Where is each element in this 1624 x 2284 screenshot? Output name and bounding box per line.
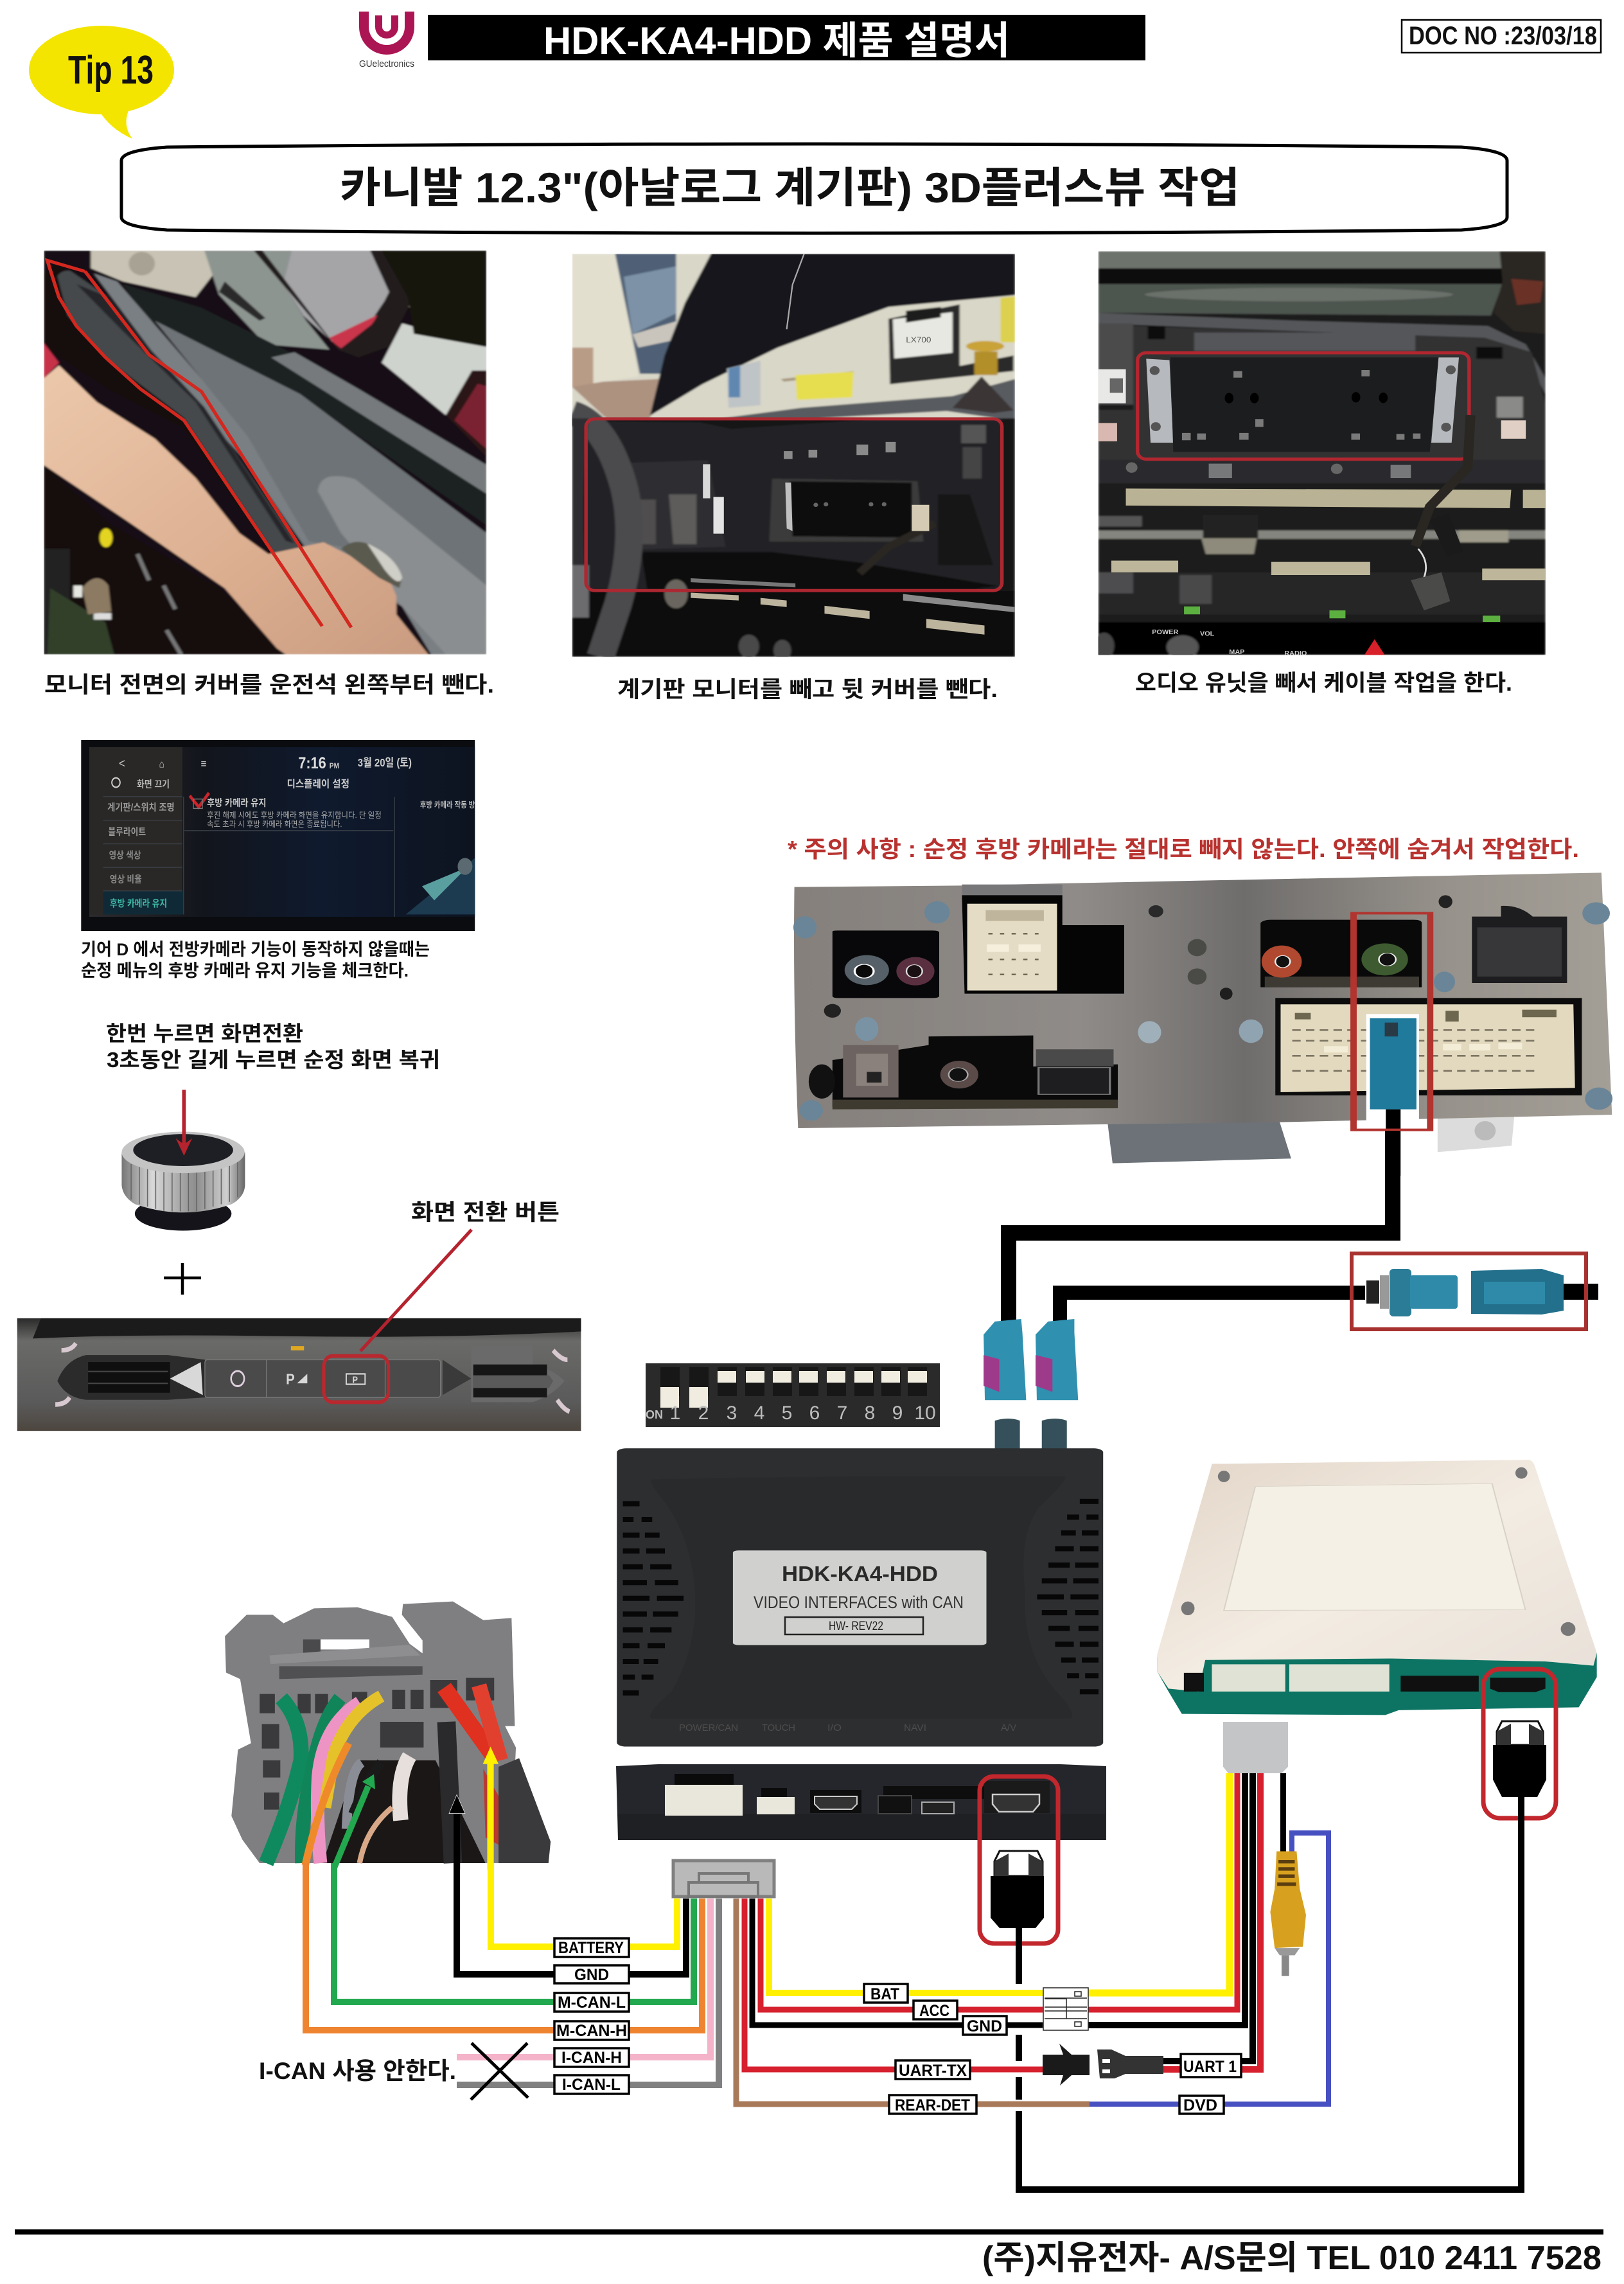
label M-CAN-H: M-CAN-H xyxy=(556,2022,627,2040)
dip switch photo: 3 xyxy=(727,1403,737,1424)
label M-CAN-L: M-CAN-L xyxy=(558,1994,626,2012)
settings note: 기어 D 에서 전방카메라 기능이 동작하지 않을때는 xyxy=(81,940,430,959)
settings screen photo: ≡ xyxy=(201,758,206,770)
head unit rear photo xyxy=(793,872,1612,1176)
dip switch photo: 10 xyxy=(914,1403,936,1424)
settings screen photo: 후방 카메라 작동 방 xyxy=(420,800,475,810)
button label: 화면 전환 버튼 xyxy=(411,1200,560,1225)
label I-CAN-L: I-CAN-L xyxy=(562,2076,621,2094)
label BATTERY: BATTERY xyxy=(558,1939,624,1957)
dip switch photo: 6 xyxy=(809,1403,820,1424)
dip switch photo: 4 xyxy=(754,1403,764,1424)
box port legends: A/V xyxy=(1001,1722,1016,1733)
settings screen photo: 7:16 xyxy=(298,754,326,772)
main title: 카니발 12.3"(아날로그 계기판) 3D플러스뷰 작업 xyxy=(340,164,1240,211)
settings screen photo: 계기판/스위치 조명 xyxy=(107,802,175,812)
box port legends: TOUCH xyxy=(762,1722,795,1733)
dip switch photo: 8 xyxy=(865,1403,875,1424)
product label text: VIDEO INTERFACES with CAN xyxy=(754,1593,964,1612)
dip switch photo xyxy=(646,1363,940,1427)
dip switch photo: 1 xyxy=(670,1403,680,1424)
HDMI cable xyxy=(1019,1797,1521,2190)
box port legends xyxy=(679,1722,1016,1733)
photo: removing monitor cover xyxy=(44,251,486,655)
X mark on unused I-CAN xyxy=(471,2043,528,2100)
label UART 1: UART 1 xyxy=(1183,2058,1237,2076)
main title xyxy=(121,144,1507,233)
settings screen photo: 영상 비율 xyxy=(110,874,142,885)
settings note: 순정 메뉴의 후방 카메라 유지 기능을 체크한다. xyxy=(81,961,409,980)
white video box xyxy=(1157,1460,1597,1715)
I-CAN note: I-CAN 사용 안한다. xyxy=(259,2058,456,2084)
label REAR-DET: REAR-DET xyxy=(895,2096,970,2114)
photo: audio unit removed: VOL xyxy=(1200,631,1214,637)
box port legends: I/O xyxy=(827,1722,842,1733)
settings screen photo: 3월 20일 (토) xyxy=(358,756,412,769)
document number: DOC NO :23/03/18 xyxy=(1409,22,1597,50)
label GND: GND xyxy=(574,1966,609,1984)
tip bubble: Tip 13 xyxy=(68,48,154,93)
settings screen photo: 디스플레이 설정 xyxy=(287,778,349,790)
warning note: * 주의 사항 : 순정 후방 카메라는 절대로 빼지 않는다. 안쪽에 숨겨서 작업한다. xyxy=(788,836,1579,862)
UART mating connector xyxy=(1043,2044,1163,2085)
header title bar: HDK-KA4-HDD 제품 설명서 xyxy=(543,19,1010,62)
photo: audio unit removed: POWER xyxy=(1152,629,1179,636)
knob instruction: 3초동안 길게 누르면 순정 화면 복귀 xyxy=(107,1048,440,1072)
knob instruction: 한번 누르면 화면전환 xyxy=(106,1022,303,1045)
footer rule xyxy=(15,2229,1603,2235)
RCA plug xyxy=(1270,1851,1306,1976)
red highlight on video box HDMI xyxy=(1483,1669,1556,1818)
settings screen photo: < xyxy=(119,756,125,770)
photo: instrument panel back cover: LX700 xyxy=(906,335,931,344)
button panel photo xyxy=(17,1318,581,1431)
main box, side view with ports xyxy=(616,1764,1106,1840)
knob with arrow xyxy=(121,1090,245,1230)
vehicle connector photo xyxy=(225,1602,551,1870)
HDMI plug: interface box xyxy=(991,1851,1044,1928)
fakra connector pair detail xyxy=(1352,1253,1586,1329)
photo: audio unit removed: MAP xyxy=(1229,650,1245,656)
main interface box, top view xyxy=(617,1448,1103,1747)
white inline connector xyxy=(1043,1988,1088,2030)
button panel photo: P xyxy=(286,1370,295,1388)
header title bar xyxy=(428,15,1145,62)
dip switch photo: 5 xyxy=(782,1403,792,1424)
product label text: HW- REV22 xyxy=(829,1620,883,1633)
photo: instrument panel back cover xyxy=(572,254,1015,661)
settings screen photo: 후방 카메라 유지 xyxy=(110,898,167,908)
label BAT: BAT xyxy=(870,1985,899,2003)
harness connector xyxy=(673,1861,774,1897)
label GND (output): GND xyxy=(967,2017,1002,2035)
caption: photo 3: 오디오 유닛을 빼서 케이블 작업을 한다. xyxy=(1135,671,1512,696)
caption: photo 1: 모니터 전면의 커버를 운전석 왼쪽부터 뺀다. xyxy=(44,673,494,698)
photo: audio unit removed xyxy=(1094,251,1546,659)
settings screen photo: 후진 해제 시에도 후방 카메라 화면을 유지합니다. 단 일정 xyxy=(207,810,382,820)
gray harness plug xyxy=(1223,1722,1288,1773)
HDMI plug: video box xyxy=(1493,1721,1546,1797)
label UART-TX: UART-TX xyxy=(899,2062,967,2080)
dip switch photo: 9 xyxy=(892,1403,903,1424)
pointer line to button xyxy=(360,1230,472,1351)
tip bubble xyxy=(29,26,174,139)
settings screen photo: ⌂ xyxy=(159,759,164,770)
red highlight on box HDMI output xyxy=(980,1776,1058,1943)
footer contact: (주)지유전자- A/S문의 TEL 010 2411 7528 xyxy=(982,2240,1602,2277)
settings screen photo: 속도 초과 시 후방 카메라 화면은 종료됩니다. xyxy=(207,820,342,829)
settings screen photo: 블루라이트 xyxy=(108,827,146,837)
label DVD: DVD xyxy=(1183,2096,1217,2114)
label GND xyxy=(554,1965,629,1984)
settings screen photo: 후방 카메라 유지 xyxy=(207,798,267,808)
knob instruction xyxy=(106,1022,440,1072)
logo: GU electronics: GUelectronics xyxy=(359,58,414,69)
box port legends: NAVI xyxy=(904,1722,926,1733)
settings screen photo xyxy=(81,740,475,931)
fakra plugs xyxy=(984,1319,1078,1449)
product label text xyxy=(754,1562,964,1634)
right wiring group xyxy=(736,1773,1328,2104)
box port legends: POWER/CAN xyxy=(679,1722,738,1733)
label ACC: ACC xyxy=(919,2002,949,2020)
settings screen photo: 화면 끄기 xyxy=(137,779,170,790)
settings note xyxy=(81,940,430,980)
dip switch photo: ON xyxy=(646,1408,663,1421)
dip switch photo: 2 xyxy=(698,1403,709,1424)
photo: audio unit removed: RADIO xyxy=(1284,650,1307,657)
logo: GU electronics xyxy=(359,12,414,69)
settings screen photo: 영상 색상 xyxy=(109,850,141,860)
label I-CAN-H: I-CAN-H xyxy=(561,2049,622,2067)
caption: photo 2: 계기판 모니터를 빼고 뒷 커버를 뺀다. xyxy=(617,677,998,702)
left wiring group xyxy=(306,1863,719,2085)
coax cables to fakra xyxy=(1009,1131,1598,1322)
button panel photo: P xyxy=(353,1375,358,1385)
dip switch photo: 7 xyxy=(837,1403,847,1424)
label BAT xyxy=(864,1984,908,2003)
product label text: HDK-KA4-HDD xyxy=(782,1562,938,1586)
settings screen photo: PM xyxy=(330,762,339,770)
plus sign xyxy=(164,1263,201,1295)
